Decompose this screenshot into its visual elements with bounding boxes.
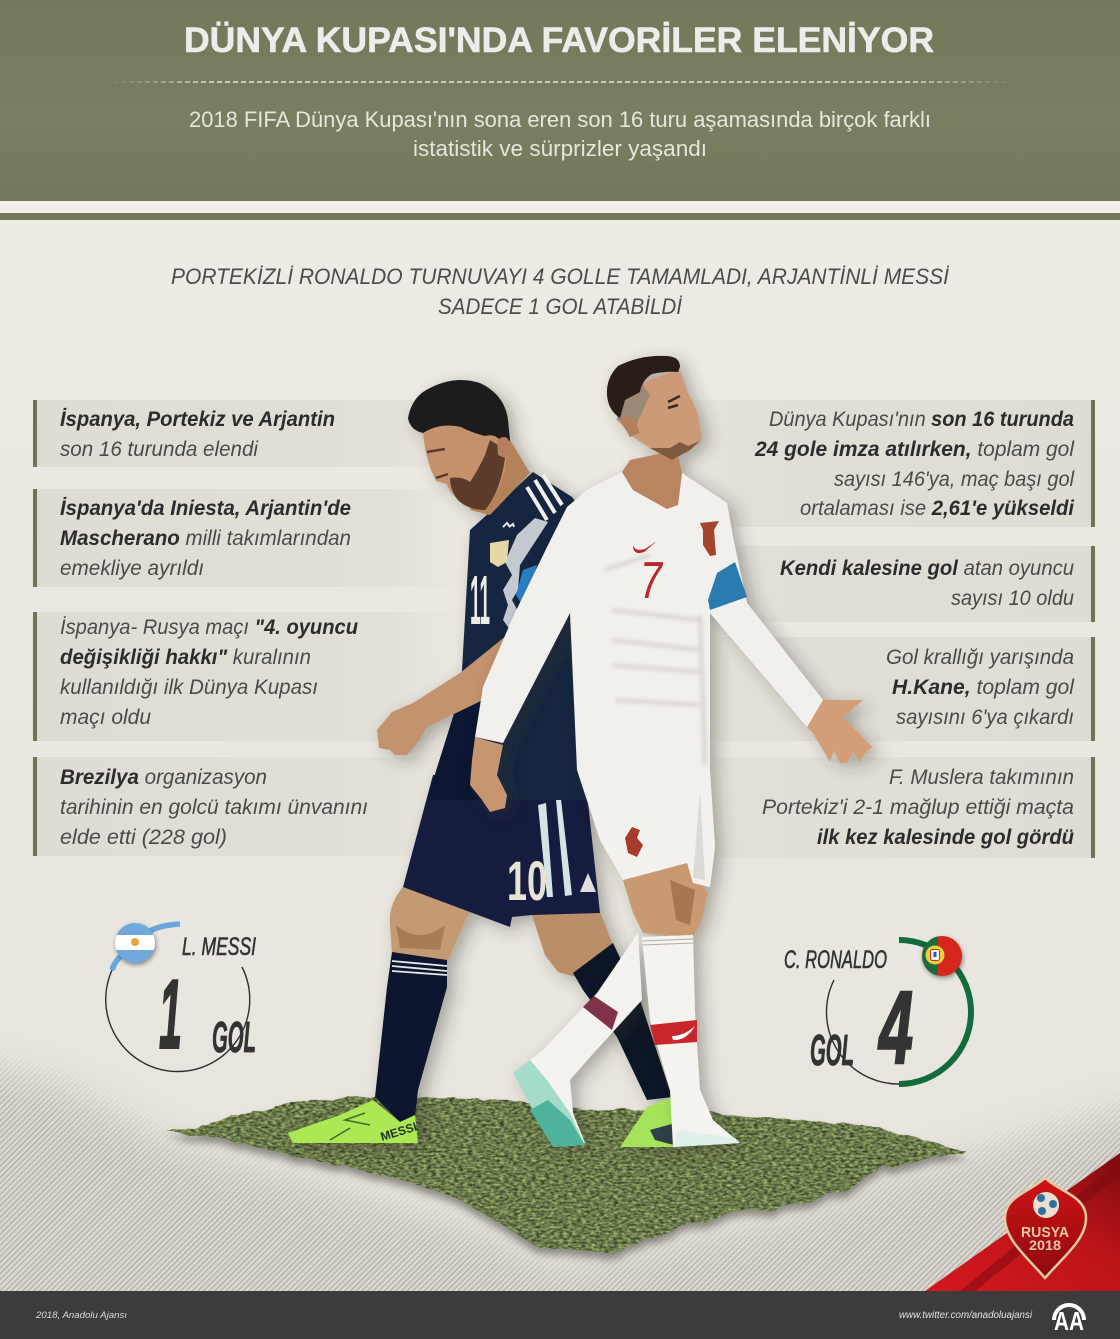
panel: fourth substitution: İspanya- Rusya maçı "4. oyuncu bbox=[60, 616, 358, 639]
footer bbox=[0, 1291, 1120, 1339]
shorts bbox=[577, 770, 715, 887]
panel: Muslera: F. Muslera takımının bbox=[889, 766, 1074, 789]
panel: retirements: Mascherano milli takımlarından bbox=[60, 527, 351, 550]
panel: Muslera bbox=[650, 757, 1095, 858]
logo: Rusya 2018 bbox=[1005, 1178, 1086, 1278]
copyright: 2018, Anadolu Ajansı bbox=[35, 1310, 127, 1321]
panel: eliminated teams: son 16 turunda elendi bbox=[60, 438, 259, 461]
panel: eliminated teams: İspanya, Portekiz ve Arjantin bbox=[60, 408, 335, 431]
jersey: 11 bbox=[470, 561, 490, 639]
panel: Muslera: Portekiz'i 2-1 mağlup ettiği maçta bbox=[762, 796, 1074, 819]
twitter link: www.twitter.com/anadoluajansi bbox=[899, 1310, 1033, 1321]
icon: cup emblem bbox=[1033, 1192, 1059, 1218]
panel: retirements bbox=[33, 489, 477, 587]
rear leg bbox=[513, 933, 642, 1147]
head bbox=[607, 356, 702, 509]
arm bbox=[377, 620, 525, 755]
panel: eliminated teams bbox=[33, 400, 477, 467]
header band bbox=[0, 0, 1120, 220]
player: Messi bbox=[288, 380, 675, 1147]
green accent arc bbox=[899, 940, 971, 1084]
panel: goals in round of 16: Dünya Kupası'nın son 16 turunda bbox=[769, 408, 1074, 431]
shirt number: 7 bbox=[640, 552, 664, 610]
panel: goals in round of 16: ortalaması ise 2,61'e yükseldi bbox=[800, 497, 1075, 520]
blue accent arcs bbox=[112, 924, 180, 970]
panel: golden boot bbox=[650, 637, 1095, 741]
dashed divider bbox=[105, 81, 1015, 83]
front boot: MESSI bbox=[379, 1120, 419, 1144]
panel: goals in round of 16: 24 gole imza atılırken, toplam gol bbox=[754, 438, 1075, 461]
panel: goals in round of 16 bbox=[650, 400, 1095, 527]
text: GOL bbox=[212, 1013, 256, 1062]
logo: AA: AA bbox=[1054, 1306, 1084, 1336]
title: DÜNYA KUPASI'NDA FAVORİLER ELENİYOR bbox=[184, 21, 934, 60]
player name: C. RONALDO bbox=[784, 946, 887, 974]
page background bbox=[0, 220, 1120, 1291]
grass patch bbox=[168, 1095, 967, 1253]
panel: own goals: Kendi kalesine gol atan oyuncu bbox=[780, 557, 1074, 580]
panel: fourth substitution: değişikliği hakkı" kuralının bbox=[60, 646, 311, 669]
front boot bbox=[288, 1100, 419, 1144]
background diagonal texture bbox=[0, 1052, 1120, 1291]
subtitle: istatistik ve sürprizler yaşandı bbox=[413, 136, 707, 161]
player: Ronaldo bbox=[470, 356, 872, 1147]
left hand bbox=[470, 737, 507, 812]
stat: Messi 1 goal bbox=[106, 923, 256, 1071]
icon: swoosh bbox=[633, 541, 657, 553]
armband bbox=[708, 562, 747, 610]
shorts bbox=[403, 775, 600, 927]
stat: Messi 1 goal: 1 bbox=[159, 959, 182, 1069]
logo: Rusya 2018: RUSYA bbox=[1021, 1225, 1070, 1241]
subtitle bbox=[189, 107, 931, 161]
icon: Argentina flag bbox=[115, 923, 155, 963]
dark wedge accent bbox=[960, 1160, 1120, 1291]
panel: Brazil record: elde etti (228 gol) bbox=[60, 826, 227, 849]
panel: own goals bbox=[650, 546, 1095, 622]
icon: crest bbox=[700, 521, 719, 556]
panel: golden boot: H.Kane, toplam gol bbox=[892, 676, 1075, 699]
front leg bbox=[375, 880, 480, 1122]
panel: Brazil record: tarihinin en golcü takımı ünvanını bbox=[60, 796, 368, 819]
panel: golden boot: sayısını 6'ya çıkardı bbox=[896, 706, 1074, 729]
red corner wedge bbox=[925, 1153, 1120, 1291]
shorts number: 10 bbox=[507, 849, 547, 912]
number of goals: 4 bbox=[878, 970, 913, 1085]
section heading: SADECE 1 GOL ATABİLDİ bbox=[438, 294, 683, 319]
panel: goals in round of 16: sayısı 146'ya, maç başı gol bbox=[834, 468, 1075, 491]
right hand bbox=[807, 700, 872, 763]
thin ring bbox=[826, 980, 899, 1084]
panel: fourth substitution bbox=[33, 612, 477, 741]
jersey bbox=[427, 472, 590, 800]
subtitle: 2018 FIFA Dünya Kupası'nın sona eren son 16 turu aşamasında birçok farklı bbox=[189, 107, 931, 132]
stat: Ronaldo 4 goals: GOL bbox=[810, 1026, 854, 1075]
panel: own goals: sayısı 10 oldu bbox=[951, 587, 1074, 610]
panel: left facts bbox=[33, 400, 477, 856]
panel: retirements: emekliye ayrıldı bbox=[60, 557, 204, 580]
player name: L. MESSI bbox=[182, 933, 256, 961]
standing leg bbox=[623, 863, 740, 1147]
section heading: PORTEKİZLİ RONALDO TURNUVAYI 4 GOLLE TAMAMLADI, ARJANTİNLİ MESSİ bbox=[171, 264, 950, 289]
rear leg bbox=[532, 912, 675, 1147]
stat: Ronaldo 4 goals bbox=[784, 936, 971, 1085]
panel: fourth substitution: kullanıldığı ilk Dünya Kupası bbox=[60, 676, 318, 699]
section heading bbox=[171, 264, 950, 319]
panel: Brazil record: Brezilya organizasyon bbox=[60, 766, 267, 789]
panel: retirements: İspanya'da Iniesta, Arjantin'de bbox=[60, 497, 351, 520]
panel: right facts bbox=[650, 400, 1095, 858]
icon: Portugal flag bbox=[922, 936, 962, 976]
thin ring bbox=[106, 967, 250, 1071]
shirt bbox=[475, 472, 823, 770]
logo: Rusya 2018: 2018 bbox=[1029, 1237, 1061, 1253]
panel: fourth substitution: maçı oldu bbox=[60, 706, 151, 729]
panel: Muslera: ilk kez kalesinde gol gördü bbox=[817, 826, 1074, 849]
head bbox=[408, 380, 530, 515]
panel: golden boot: Gol krallığı yarışında bbox=[886, 646, 1074, 669]
panel: Brazil record bbox=[33, 757, 477, 856]
